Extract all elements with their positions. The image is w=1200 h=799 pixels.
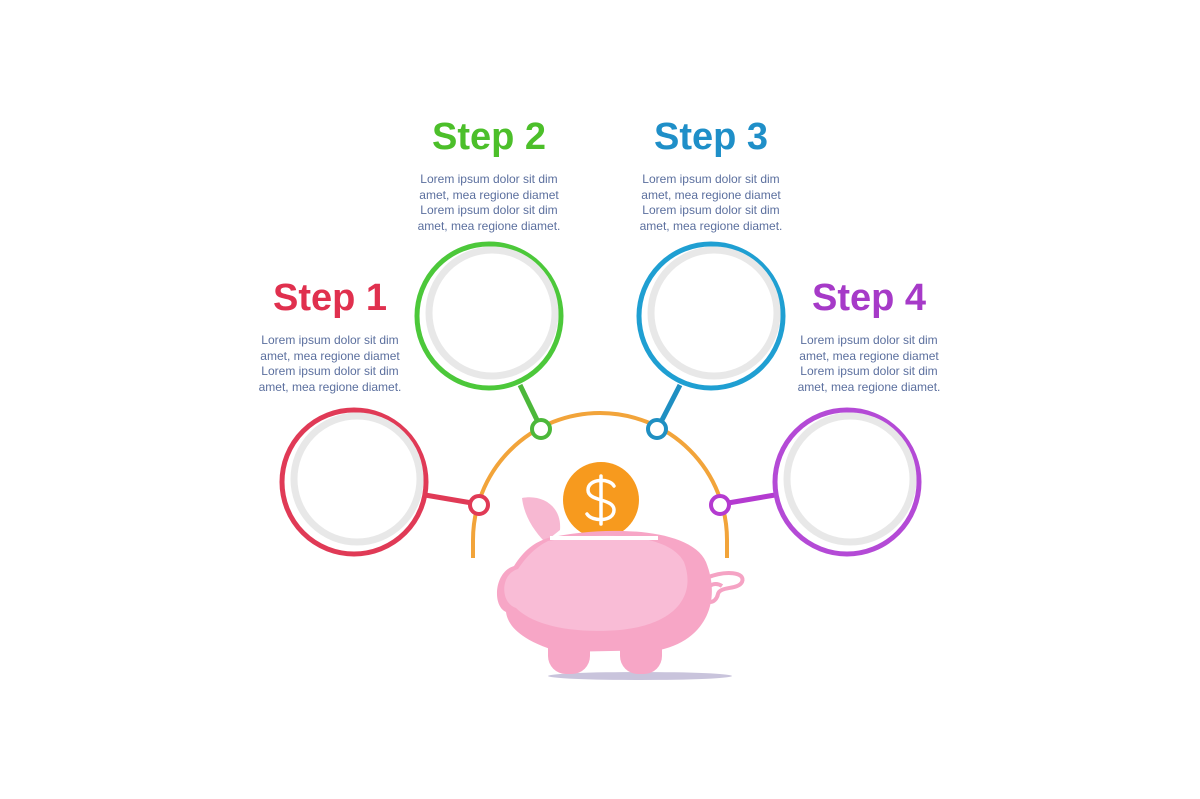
step 1 text: amet, mea regione diamet xyxy=(260,348,400,362)
step 4 text: Lorem ipsum dolor sit dim xyxy=(800,333,938,347)
piggy bank xyxy=(497,497,743,680)
step 4 text: Step 4 xyxy=(812,277,926,319)
step 3 text: Step 3 xyxy=(654,116,768,158)
circle: step 2 xyxy=(417,244,561,388)
step 2 text: Step 2 xyxy=(432,116,546,158)
circle: step 3 xyxy=(639,244,783,388)
step 2 text: amet, mea regione diamet xyxy=(419,188,559,202)
arc xyxy=(473,413,727,558)
step 2 text xyxy=(418,116,560,232)
step 1 text: Step 1 xyxy=(273,277,387,319)
step 2 text: Lorem ipsum dolor sit dim xyxy=(420,203,558,217)
step 1 text: Lorem ipsum dolor sit dim xyxy=(261,333,399,347)
step 2 text: Lorem ipsum dolor sit dim xyxy=(420,172,558,186)
step 3 text xyxy=(640,116,782,232)
step 4 text: amet, mea regione diamet. xyxy=(798,380,940,394)
circle: step 4 xyxy=(775,410,919,554)
connector lines xyxy=(425,385,775,503)
step 4 text: amet, mea regione diamet xyxy=(799,348,939,362)
icon: coin xyxy=(563,462,639,538)
circle: step 1 xyxy=(282,410,426,554)
step 3 text: amet, mea regione diamet. xyxy=(640,218,782,232)
step 3 text: Lorem ipsum dolor sit dim xyxy=(642,203,780,217)
nodes xyxy=(470,420,729,514)
step 1 text xyxy=(259,277,401,394)
step 2 text: amet, mea regione diamet. xyxy=(418,218,560,232)
step 3 text: Lorem ipsum dolor sit dim xyxy=(642,172,780,186)
step 4 text xyxy=(798,277,940,394)
step 3 text: amet, mea regione diamet xyxy=(641,188,781,202)
step 1 text: Lorem ipsum dolor sit dim xyxy=(261,364,399,378)
step 1 text: amet, mea regione diamet. xyxy=(259,380,401,394)
step 4 text: Lorem ipsum dolor sit dim xyxy=(800,364,938,378)
